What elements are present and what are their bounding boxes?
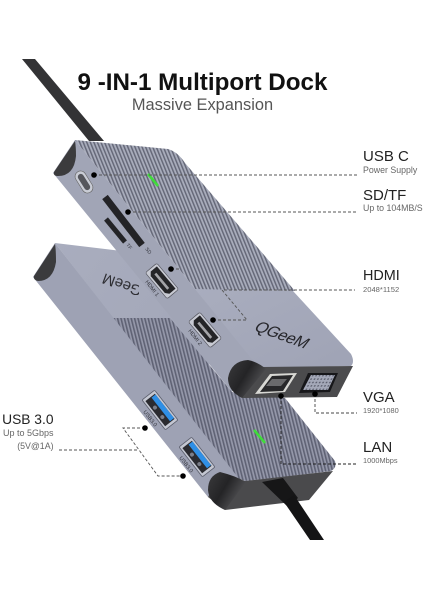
callout: HDMI: 2048*1152: [363, 285, 399, 294]
callout: SD/TF: SD/TF: [363, 187, 406, 204]
lower dock top surface: [55, 243, 240, 480]
lower LED: [254, 430, 265, 443]
callout: VGA: 1920*1080: [363, 406, 399, 415]
callout: USB 3.0: Up to 5Gbps: [3, 428, 54, 438]
callout: USB 3.0: [2, 412, 186, 479]
TF label: TF: [124, 243, 133, 251]
upper dock dark side: [240, 366, 353, 398]
port label USB3.0 first: USB3.0: [141, 410, 158, 428]
upper dock plain surface: [195, 289, 353, 368]
title: 9 -IN-1 Multiport Dock: [78, 69, 328, 96]
upper dock front strip: [53, 140, 262, 392]
LAN port: [255, 373, 297, 394]
VGA port: [299, 373, 338, 393]
HDMI 1 port: [145, 263, 179, 299]
lower dock front strip: [33, 243, 240, 497]
lower dock left cap: [34, 244, 56, 281]
bottom cable: [262, 478, 324, 540]
HDMI 2 label: HDMI 2: [186, 329, 203, 347]
callout: HDMI: HDMI: [363, 268, 400, 284]
SD slot: [105, 197, 142, 245]
callout: LAN: LAN: [363, 439, 392, 456]
upper dock left cap: [54, 141, 76, 176]
top cable: [22, 59, 104, 141]
TF slot: [106, 219, 125, 242]
SD label: SD: [143, 247, 153, 256]
callout: VGA: VGA: [363, 389, 395, 406]
subtitle: Massive Expansion: [132, 96, 273, 114]
lower dock: [33, 243, 336, 510]
upper dock end cap: [228, 360, 266, 398]
callout: SD/TF: [125, 187, 423, 215]
HDMI 1 label: HDMI 1: [143, 280, 160, 298]
callout: USB C: [91, 148, 418, 178]
callout: LAN: [278, 393, 398, 465]
lower dock ribbed surface: [113, 318, 336, 481]
lower dock end cap: [208, 472, 246, 510]
port label USB3.0 second: USB3.0: [177, 456, 194, 474]
HDMI 2 port: [188, 312, 222, 348]
QGeeM logo: QGeeM: [250, 319, 313, 352]
USB-C port: [73, 169, 95, 195]
callout: VGA: [312, 389, 399, 415]
mirrored QGeeM logo: QGeeM: [100, 269, 155, 303]
USB 3.0 port 2: [179, 437, 215, 477]
callout: USB 3.0: USB 3.0: [2, 412, 54, 427]
upper dock ribbed surface: [75, 140, 295, 291]
lower dock dark side: [208, 471, 333, 510]
upper dock: [53, 140, 353, 398]
callout: USB 3.0: (5V@1A): [17, 441, 54, 451]
upper LED: [148, 174, 158, 186]
callout: USB C: USB C: [363, 148, 409, 165]
callout: LAN: 1000Mbps: [363, 456, 398, 465]
callout: USB C: Power Supply: [363, 165, 418, 175]
callout: HDMI: [168, 266, 400, 323]
USB 3.0 port 1: [142, 390, 178, 430]
callout: SD/TF: Up to 104MB/S: [363, 203, 423, 213]
